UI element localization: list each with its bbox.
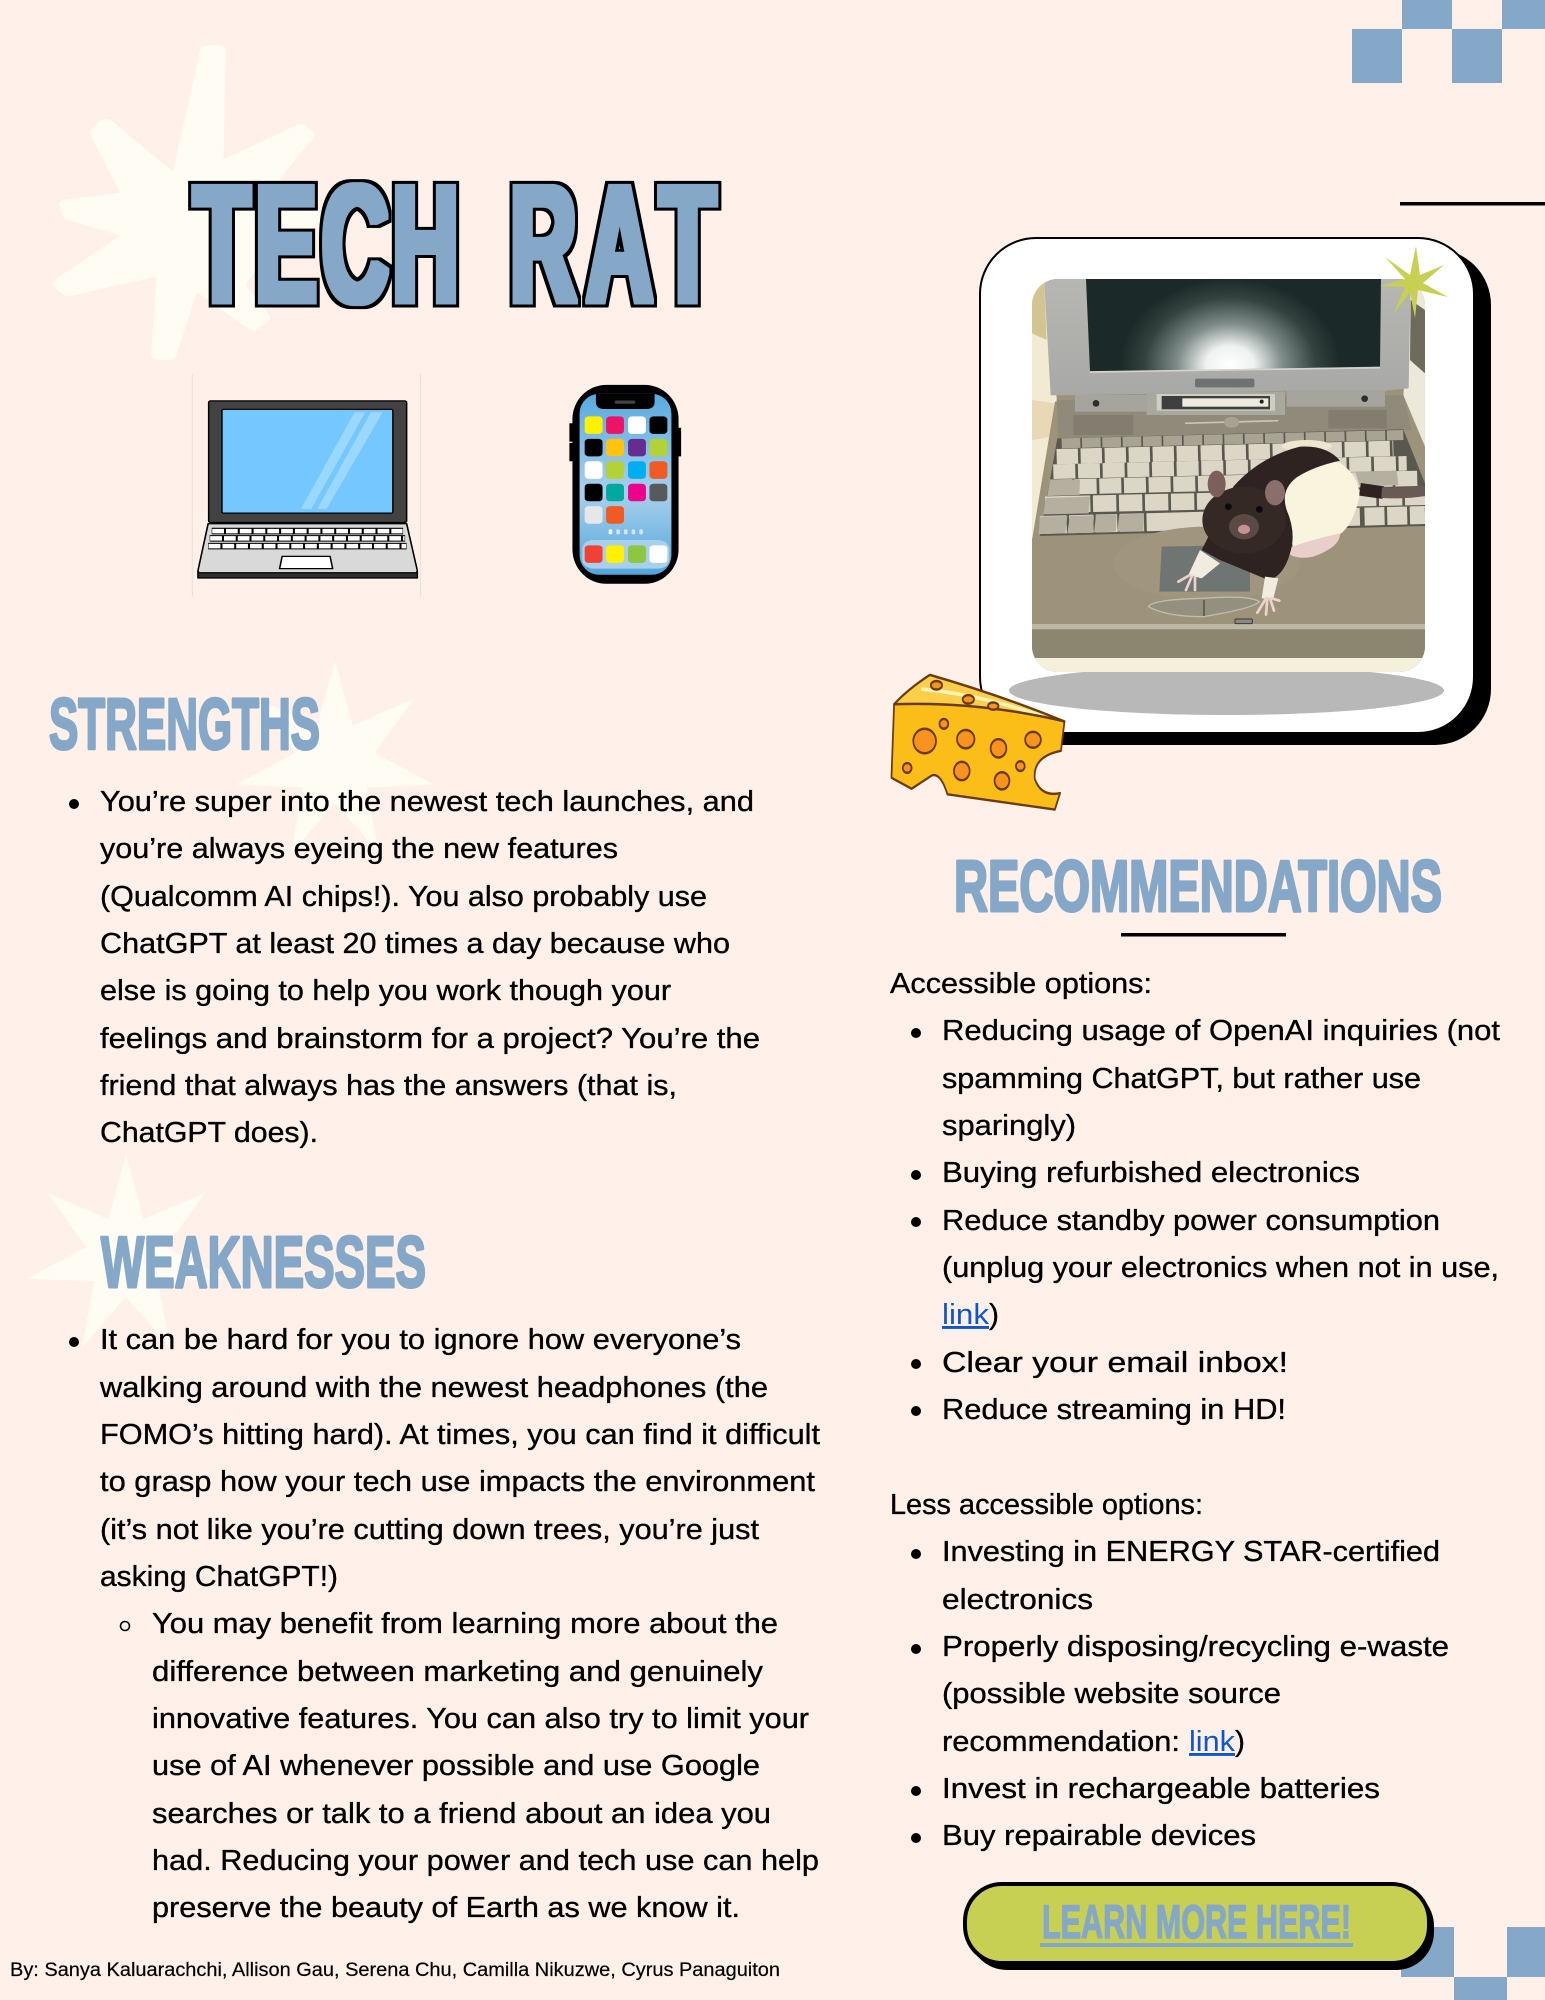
heading: strengths: STRENGTHS	[49, 685, 320, 765]
accessible options list: (unplug your electronics when not in use,	[942, 1252, 1499, 1284]
strengths text block: (Qualcomm AI chips!). You also probably use	[100, 881, 707, 913]
less accessible options list: (possible website source	[942, 1678, 1281, 1710]
strengths text block: ChatGPT at least 20 times a day because who	[100, 928, 730, 960]
weaknesses text block: It can be hard for you to ignore how everyone’s	[100, 1324, 741, 1356]
icon: green sparkle	[1380, 246, 1448, 318]
weaknesses text block: difference between marketing and genuinely	[152, 1656, 764, 1688]
top right rule	[1400, 202, 1545, 206]
accessible options list: Reduce streaming in HD!	[942, 1394, 1286, 1426]
less accessible options list: Invest in rechargeable batteries	[942, 1773, 1380, 1805]
less accessible options list: Investing in ENERGY STAR-certified	[942, 1536, 1440, 1568]
strengths text block: feelings and brainstorm for a project? You’re the	[100, 1023, 760, 1055]
weaknesses text block: (it’s not like you’re cutting down trees, you’re just	[100, 1514, 759, 1546]
less accessible options list: Buy repairable devices	[942, 1820, 1256, 1852]
accessible options list: Reduce standby power consumption	[942, 1205, 1440, 1237]
less accessible options list: electronics	[942, 1584, 1093, 1616]
heading: weaknesses: WEAKNESSES	[101, 1223, 426, 1303]
strengths text block: else is going to help you work though your	[100, 975, 671, 1007]
accessible options list: Clear your email inbox!	[942, 1347, 1288, 1379]
accessible options list: Reducing usage of OpenAI inquiries (not	[942, 1015, 1500, 1047]
strengths text block: you’re always eyeing the new features	[100, 833, 618, 865]
photo: rat on a laptop	[1030, 277, 1427, 673]
button: learn more	[965, 1884, 1434, 1970]
icon: cheese	[891, 675, 1064, 810]
weaknesses text block	[69, 1324, 820, 1924]
accessible options list: )	[989, 1299, 999, 1331]
less accessible options list	[890, 1489, 1449, 1852]
accessible options list: sparingly)	[942, 1110, 1076, 1142]
footer credits: By: Sanya Kaluarachchi, Allison Gau, Serena Chu, Camilla Nikuzwe, Cyrus Panaguiton	[10, 1960, 780, 1981]
weaknesses text block: You may benefit from learning more about the	[152, 1608, 778, 1640]
decorative sunburst behind title	[60, 51, 319, 354]
weaknesses text block: searches or talk to a friend about an idea you	[152, 1798, 771, 1830]
weaknesses text block: preserve the beauty of Earth as we know it.	[152, 1892, 740, 1924]
accessible options list	[890, 968, 1500, 1426]
decorative star behind strengths heading	[236, 660, 434, 854]
checker pattern bottom right	[1401, 1927, 1545, 2000]
button: learn more: LEARN MORE HERE!	[1042, 1895, 1351, 1948]
weaknesses text block: walking around with the newest headphones (the	[99, 1372, 768, 1404]
accessible options list: link	[942, 1299, 990, 1331]
panel: photo frame	[980, 238, 1491, 745]
weaknesses text block: innovative features. You can also try to limit your	[152, 1703, 809, 1735]
recommendations rule	[1121, 933, 1286, 936]
icon: smartphone	[569, 385, 681, 584]
decorative star behind weaknesses heading	[27, 1154, 225, 1348]
strengths text block: friend that always has the answers (that is,	[100, 1070, 677, 1102]
weaknesses text block: asking ChatGPT!)	[100, 1561, 338, 1593]
strengths text block	[69, 786, 760, 1149]
icon: laptop	[192, 374, 420, 597]
accessible options list: Buying refurbished electronics	[942, 1157, 1360, 1189]
less accessible options list: link	[1189, 1726, 1236, 1758]
strengths text block: ChatGPT does).	[100, 1117, 318, 1149]
less accessible options list: Properly disposing/recycling e-waste	[942, 1631, 1449, 1663]
less accessible options list: )	[1235, 1726, 1245, 1758]
weaknesses text block: to grasp how your tech use impacts the environment	[100, 1466, 815, 1498]
accessible options list: spamming ChatGPT, but rather use	[942, 1063, 1421, 1095]
weaknesses text block: use of AI whenever possible and use Google	[152, 1750, 760, 1782]
strengths text block: You’re super into the newest tech launches, and	[100, 786, 754, 818]
checker pattern top right	[1352, 0, 1545, 83]
weaknesses text block: had. Reducing your power and tech use can help	[152, 1845, 819, 1877]
title: TECH RAT	[194, 150, 716, 338]
less accessible options list: Less accessible options:	[890, 1489, 1203, 1521]
less accessible options list: recommendation:	[942, 1726, 1180, 1758]
weaknesses text block: FOMO’s hitting hard). At times, you can find it difficult	[100, 1419, 820, 1451]
accessible options list: Accessible options:	[890, 968, 1152, 1000]
